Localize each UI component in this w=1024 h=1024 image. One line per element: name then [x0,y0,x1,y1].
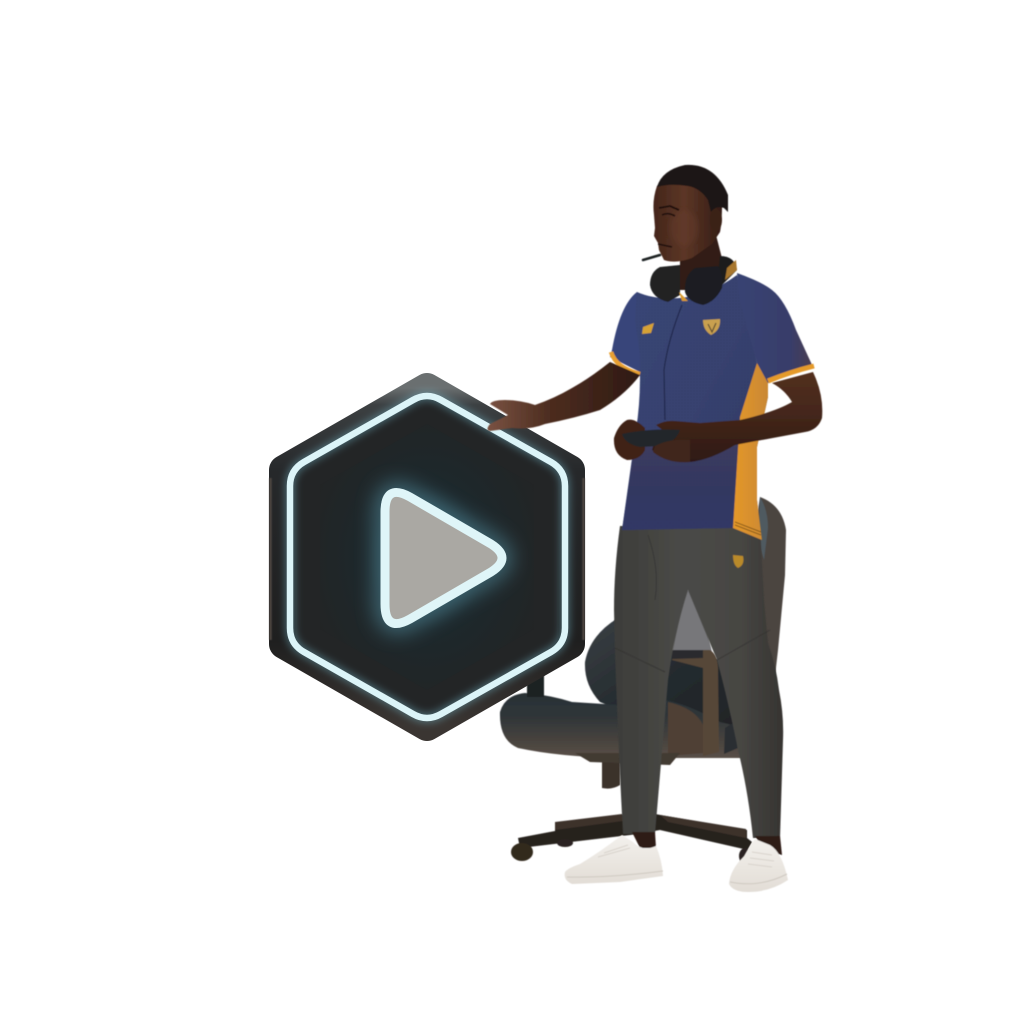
neon border line [290,396,565,718]
gaming chair [500,497,786,864]
chair backrest gray centre [672,590,712,652]
right arm [652,372,822,462]
head [653,172,722,262]
ear [710,209,722,231]
shirt left sleeve [610,292,640,372]
right fingers over controller [653,440,690,462]
chair post behind hexagon [527,675,544,697]
chair backrest lower bulb [585,618,745,730]
hexagon rim warm edge [270,478,584,640]
mouth [658,244,672,247]
ankle right [755,836,782,855]
neck [680,235,725,290]
hair [657,165,728,212]
trouser seams [615,535,770,672]
chair backrest upper [745,497,786,720]
game controller [622,430,680,447]
shirt orange side panel [733,363,768,540]
shirt logo right [703,319,720,335]
chair caster left [511,843,533,861]
hexagon play sign [270,388,584,726]
trouser logo [733,555,743,568]
hexagon inner face [308,410,546,704]
chair caster middle [557,839,573,847]
chair seat cushion [500,693,745,758]
headphone cup right [685,266,722,305]
play icon [385,492,502,624]
shirt logo left [642,323,654,334]
headphone cup left [650,265,680,302]
shirt right sleeve [737,273,813,383]
neon border glow [290,396,565,718]
cheek shading [670,210,698,246]
left arm and hand on the hexagon [488,362,640,431]
shirt collar accent [679,292,688,301]
trousers [614,526,783,838]
sleeve trims [611,352,640,374]
headset microphone [643,255,660,260]
shirt torso [622,275,768,540]
headphone band [718,256,737,285]
eye and brow [659,206,679,210]
person [488,165,822,892]
chair star base [518,814,752,850]
left hand holding controller [614,420,645,460]
right shoe [729,839,788,892]
chair gas lift [602,758,620,789]
shirt zip line [664,305,682,420]
chair caster right [739,848,751,864]
left shoe [565,835,663,884]
chair armrest [672,650,719,756]
ankle left [632,832,656,848]
play icon glow [385,492,502,624]
hexagon outer rim [284,388,570,726]
